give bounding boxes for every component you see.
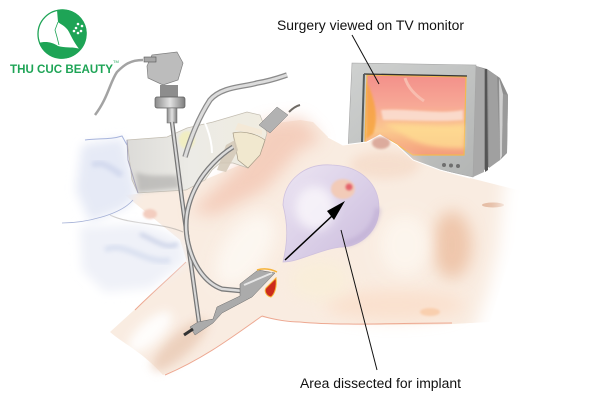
icon: camera head cable [95,60,143,115]
icon: endoscope shaft [172,122,199,322]
icon: endoscope camera [144,52,185,123]
icon: upper nipple [372,137,390,149]
logo: Thu Cuc Beauty [10,9,119,76]
icon: patient hair and ear [110,209,183,232]
label: Area dissected for implant: Area dissected for implant [300,376,461,391]
monitor control buttons [442,163,460,168]
trademark: TM [113,59,119,64]
nipple on implant [331,179,355,199]
icon: hand instrument handle [259,105,300,133]
illustration: patient torso and arm [110,118,570,377]
arrow: implant pointer [285,201,345,260]
leader line: implant [341,230,377,370]
leader line: TV monitor [352,35,379,84]
icon: incision [257,269,277,297]
skin contour lines [135,262,452,375]
icon: surgical gown [62,136,185,292]
shading on the skin [122,118,504,377]
icon: trocar instrument in incision [184,270,275,335]
label: Surgery viewed on TV monitor: Surgery viewed on TV monitor [277,18,465,33]
logo mark [38,9,87,59]
icon: implant pocket [283,165,379,262]
skin fade at right edge [470,175,570,345]
icon: TV monitor [348,63,508,177]
logo wordmark: THU CUC BEAUTY [10,64,113,76]
monitor screen [362,74,467,155]
icon: curved instrument cable [186,147,243,291]
icon: gloved hand [127,112,267,193]
icon: suction tube [185,75,287,157]
